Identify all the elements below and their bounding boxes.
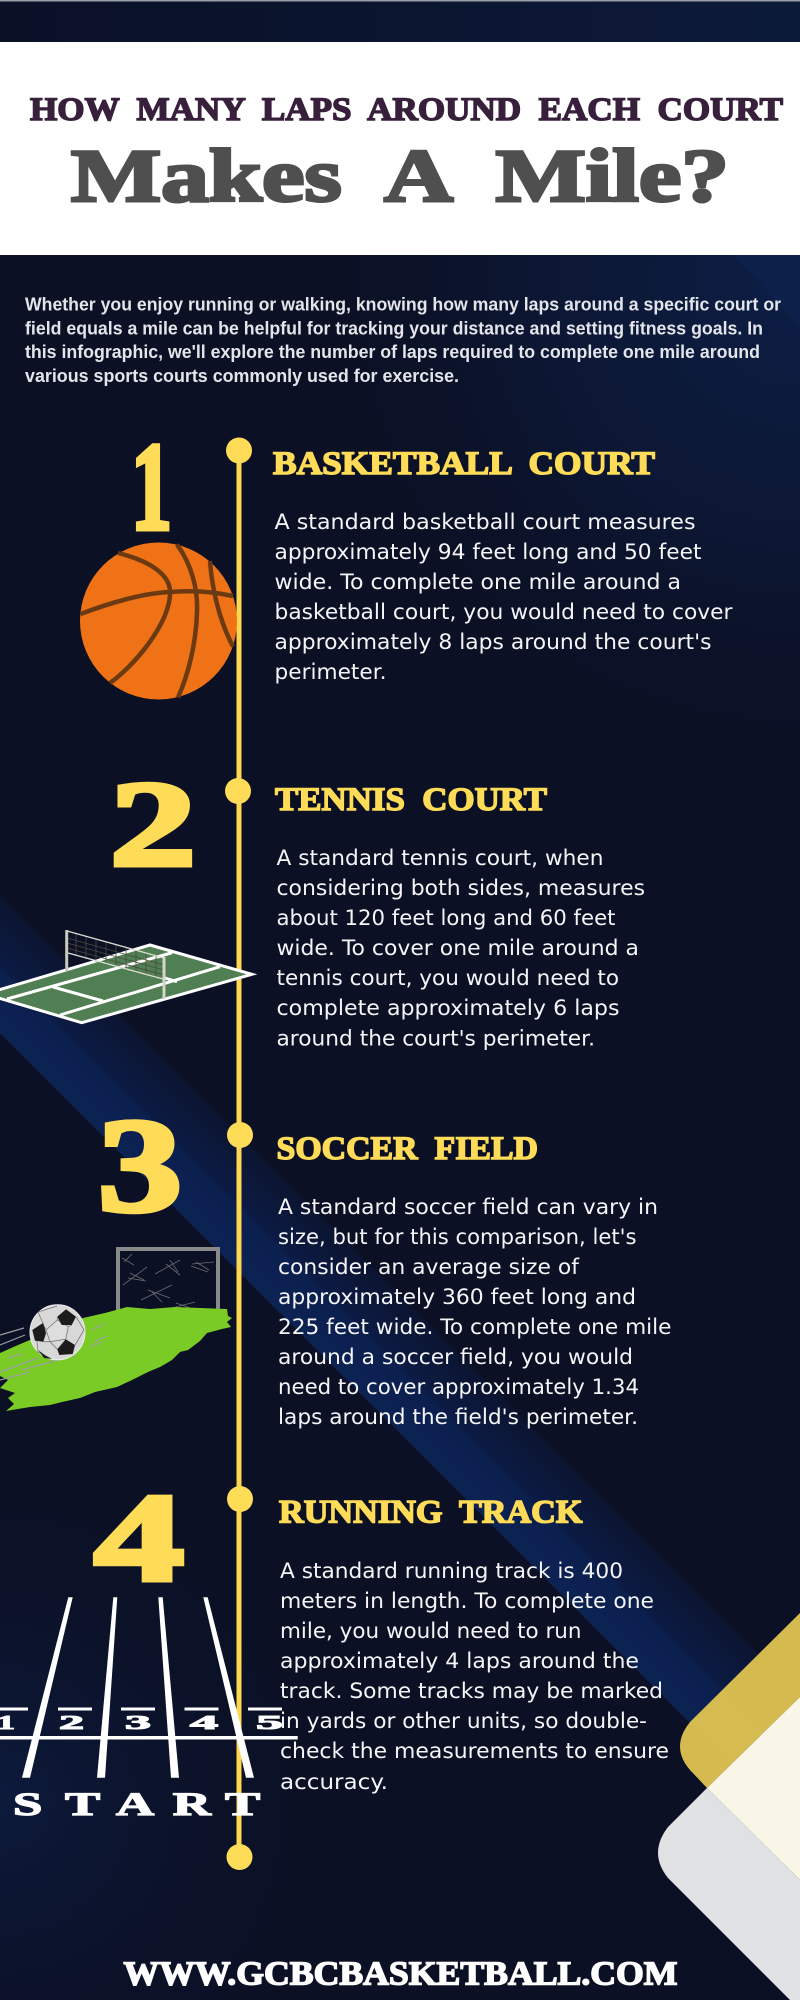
net — [67, 934, 164, 978]
intro text: various sports courts commonly used for exercise. — [25, 366, 459, 386]
body text: tennis court, you would need to — [276, 966, 619, 991]
heading: BASKETBALL COURT — [273, 446, 655, 482]
lane numbers — [0, 1712, 283, 1734]
body text: need to cover approximately 1.34 — [278, 1375, 639, 1400]
number 1: 1 — [131, 418, 172, 557]
body text: around a soccer field, you would — [278, 1345, 633, 1370]
body text: A standard soccer field can vary in — [278, 1195, 658, 1220]
intro text — [25, 294, 781, 386]
section 1: basketball court — [80, 418, 733, 700]
lane numbers: 2 — [59, 1712, 84, 1734]
body text: about 120 feet long and 60 feet — [276, 906, 616, 931]
lane numbers: 3 — [125, 1712, 151, 1734]
goal — [118, 1249, 218, 1312]
body text: approximately 4 laps around the — [280, 1649, 639, 1674]
body text: perimeter. — [274, 660, 386, 685]
title line 1: HOW MANY LAPS AROUND EACH COURT — [30, 92, 783, 128]
corner shapes — [658, 1613, 800, 2000]
body text: approximately 360 feet long and — [278, 1285, 636, 1310]
body text: A standard running track is 400 — [280, 1559, 623, 1584]
ball — [30, 1305, 85, 1360]
intro text: Whether you enjoy running or walking, knowing how many laps around a specific court or — [25, 294, 781, 314]
body text: mile, you would need to run — [280, 1619, 582, 1644]
body text: considering both sides, measures — [276, 876, 645, 901]
body text — [276, 846, 645, 1052]
body text: complete approximately 6 laps — [276, 996, 620, 1021]
body text — [274, 510, 733, 685]
grass streaks — [0, 1324, 107, 1380]
diagonal band: upper right — [733, 255, 800, 326]
body text: 225 feet wide. To complete one mile — [278, 1315, 672, 1340]
section 2: tennis court — [0, 757, 645, 1052]
title line 2: Makes A Mile? — [71, 135, 729, 218]
heading: TENNIS COURT — [275, 782, 547, 818]
grass — [0, 1307, 232, 1411]
timeline — [225, 438, 253, 1870]
icon: basketball — [80, 542, 237, 700]
intro text: this infographic, we'll explore the number of laps required to complete one mile around — [25, 342, 760, 362]
body text: basketball court, you would need to cover — [274, 600, 733, 625]
body text: wide. To complete one mile around a — [274, 570, 681, 595]
start label: START — [13, 1786, 260, 1822]
body text: approximately 8 laps around the court's — [274, 630, 712, 655]
body text — [278, 1195, 672, 1430]
body text: consider an average size of — [278, 1255, 579, 1280]
number 4: 4 — [94, 1469, 184, 1608]
lane numbers: 5 — [256, 1712, 283, 1734]
section 3: soccer field — [0, 1092, 672, 1430]
footer website: WWW.GCBCBASKETBALL.COM — [124, 1956, 678, 1992]
body text: size, but for this comparison, let's — [278, 1225, 636, 1250]
body text: A standard tennis court, when — [276, 846, 604, 871]
heading: RUNNING TRACK — [279, 1495, 583, 1531]
icon: running track — [0, 1597, 298, 1822]
body text: track. Some tracks may be marked — [280, 1679, 663, 1704]
body text: around the court's perimeter. — [276, 1026, 595, 1052]
icon: soccer goal, grass and ball — [0, 1249, 232, 1411]
body text: wide. To cover one mile around a — [276, 936, 639, 961]
header panel — [0, 42, 800, 255]
section 4: running track — [0, 1469, 669, 1822]
heading: SOCCER FIELD — [276, 1131, 538, 1167]
body text — [280, 1559, 669, 1795]
body text: meters in length. To complete one — [280, 1589, 654, 1614]
icon: tennis court — [0, 930, 252, 1023]
lane numbers: 4 — [190, 1712, 218, 1734]
body text: approximately 94 feet long and 50 feet — [274, 540, 702, 565]
number 2: 2 — [110, 757, 196, 892]
body text: accuracy. — [280, 1770, 388, 1795]
intro text: field equals a mile can be helpful for tracking your distance and setting fitness goals. In — [25, 318, 763, 338]
body text: laps around the field's perimeter. — [278, 1405, 638, 1430]
diagonal band: main — [0, 895, 800, 1833]
number 3: 3 — [98, 1092, 182, 1240]
body text: in yards or other units, so double- — [280, 1709, 647, 1734]
body text: A standard basketball court measures — [274, 510, 696, 535]
body text: check the measurements to ensure — [280, 1739, 669, 1764]
